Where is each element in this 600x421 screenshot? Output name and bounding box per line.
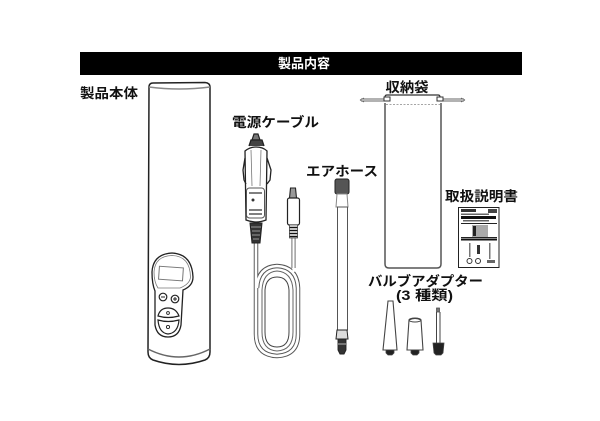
label: air hose: エアホース	[306, 164, 378, 179]
label: power cable: 電源ケーブル	[232, 114, 320, 130]
product: instruction manual	[458, 208, 499, 268]
control panel	[152, 253, 193, 337]
product: valve adapters	[383, 301, 444, 355]
label: valve adapters: バルブアダプター	[368, 273, 483, 289]
product: air hose	[335, 179, 349, 354]
product: compressor body	[148, 82, 210, 364]
coiled cable	[256, 238, 298, 356]
DC jack	[288, 188, 300, 238]
title banner: 製品内容	[278, 56, 330, 71]
adapter: needle	[433, 308, 444, 355]
label: valve adapters: (3 種類)	[396, 288, 453, 303]
drawstring right	[440, 98, 465, 102]
drawstring left	[360, 98, 385, 102]
label: instruction manual: 取扱説明書	[445, 188, 518, 204]
label: main unit: 製品本体	[80, 85, 139, 101]
title banner	[80, 52, 522, 75]
label: valve adapters	[368, 273, 483, 303]
adapter: long cone	[383, 301, 397, 355]
label: storage bag: 収納袋	[386, 79, 429, 95]
adapter: short cone	[407, 318, 423, 355]
product: car plug power cable	[243, 134, 300, 356]
cigarette plug	[243, 134, 271, 243]
product: storage bag	[360, 95, 465, 268]
